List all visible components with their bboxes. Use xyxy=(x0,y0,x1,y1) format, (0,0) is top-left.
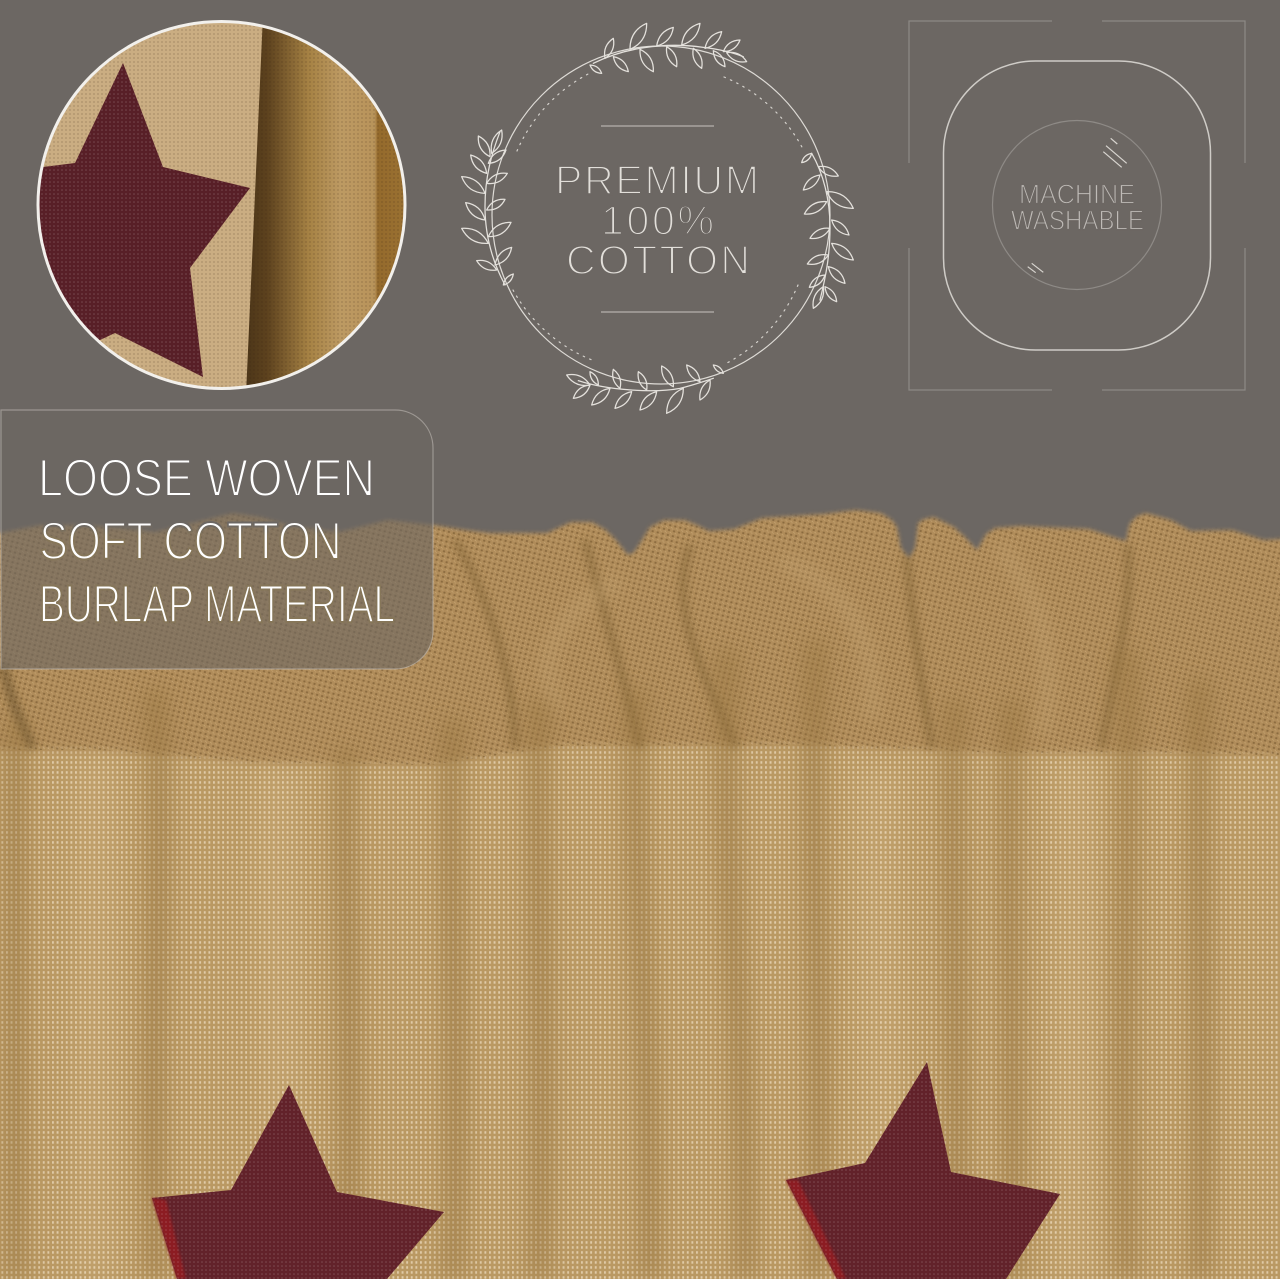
laurel branches xyxy=(462,23,853,413)
text panel: loose woven soft cotton burlap material xyxy=(1,410,433,669)
badge text: 100% xyxy=(601,198,714,244)
curtain: burlap fabric with rod pocket and stars xyxy=(0,490,1280,1279)
close-up star xyxy=(40,63,250,377)
top branch xyxy=(590,23,747,73)
left branch xyxy=(462,130,513,285)
lower curtain panel xyxy=(0,740,1280,1279)
translucent rounded panel xyxy=(1,410,433,669)
close-up fabric xyxy=(44,23,404,387)
machine washable text xyxy=(1011,178,1144,236)
detail circle: close-up of fabric and star xyxy=(30,15,415,400)
corner brackets xyxy=(909,21,1245,390)
dotted inner ring xyxy=(513,73,803,363)
badge text xyxy=(555,157,759,283)
badge text: COTTON xyxy=(566,237,750,283)
badge: machine washable xyxy=(909,21,1245,390)
shine ticks xyxy=(1028,138,1127,273)
panel text xyxy=(38,449,395,634)
badge text: PREMIUM xyxy=(555,157,759,203)
wreath ring xyxy=(492,46,830,384)
inner circle xyxy=(992,120,1162,290)
machine washable text: MACHINE xyxy=(1019,178,1135,210)
rod pocket header band xyxy=(0,490,1280,765)
circle border xyxy=(38,22,405,388)
right branch xyxy=(802,153,853,308)
machine washable text: WASHABLE xyxy=(1011,204,1144,236)
bottom branch xyxy=(567,365,723,413)
star: bottom right xyxy=(786,1062,1060,1279)
rounded square outline xyxy=(944,61,1210,350)
panel text: SOFT COTTON xyxy=(40,512,342,571)
star: bottom left xyxy=(152,1085,444,1279)
badge: premium 100% cotton wreath xyxy=(462,23,853,413)
fold shadows xyxy=(16,640,1202,1279)
panel text: LOOSE WOVEN xyxy=(38,449,375,508)
rule below badge text xyxy=(601,311,714,313)
panel text: BURLAP MATERIAL xyxy=(39,575,395,634)
rule above badge text xyxy=(601,125,714,127)
